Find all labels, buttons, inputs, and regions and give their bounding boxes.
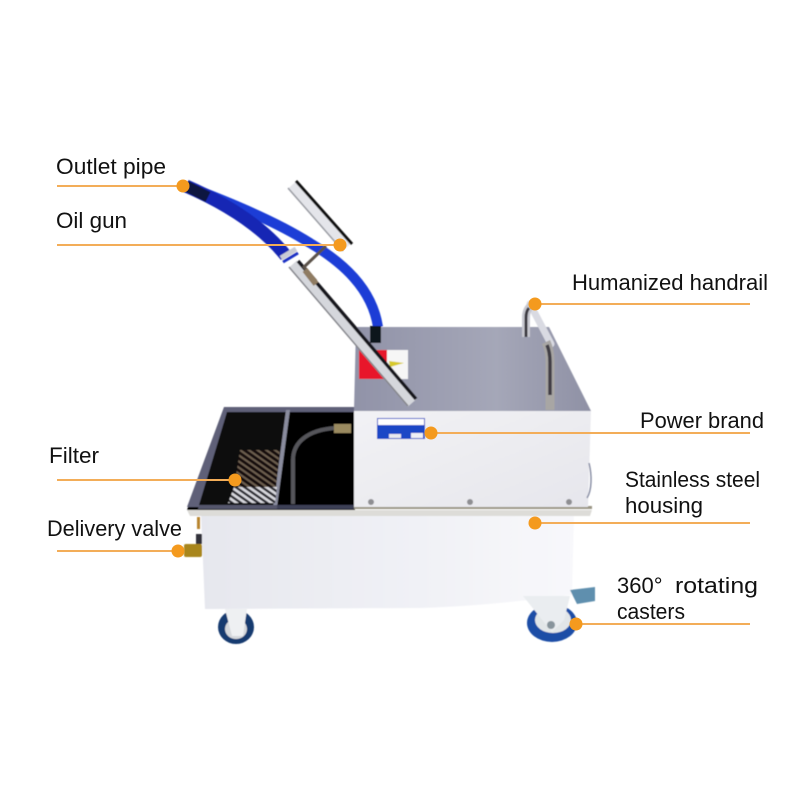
filter mesh <box>234 450 280 488</box>
label: Humanized handrail: Humanized handrail <box>572 270 768 295</box>
label: Stainless steel housing: housing <box>625 493 703 518</box>
right caster <box>523 587 595 642</box>
label: Filter <box>49 443 242 486</box>
label: Delivery valve <box>47 516 184 558</box>
casters <box>218 587 595 644</box>
label: Oil gun: Oil gun <box>56 208 127 233</box>
label: Filter: Filter <box>49 443 99 468</box>
label: 360° rotating casters: rotating <box>675 573 758 598</box>
lower stainless steel body <box>201 514 574 609</box>
left caster <box>218 609 254 644</box>
delivery valve <box>184 517 202 557</box>
oil gun <box>281 181 416 406</box>
power cord <box>587 463 591 498</box>
label: Power brand <box>424 408 764 440</box>
flexible hose <box>293 428 335 504</box>
filter tray <box>187 407 355 510</box>
rim <box>187 510 592 516</box>
label: 360° rotating casters <box>570 573 758 630</box>
label: 360° rotating casters: casters <box>617 599 685 624</box>
label: Outlet pipe: Outlet pipe <box>56 154 166 179</box>
label: Stainless steel housing <box>528 467 760 530</box>
label: 360° rotating casters: 360° <box>617 573 663 598</box>
label: Power brand: Power brand <box>640 408 764 433</box>
machine <box>184 181 595 644</box>
upper housing top <box>354 327 591 411</box>
upper housing front <box>354 411 591 507</box>
outlet pipe <box>186 186 381 343</box>
warning sticker <box>359 350 408 379</box>
label: Outlet pipe <box>56 154 190 192</box>
screws <box>368 499 572 505</box>
handrail <box>526 304 551 410</box>
label: Oil gun <box>56 208 346 252</box>
control plate <box>377 418 425 439</box>
label: Delivery valve: Delivery valve <box>47 516 182 541</box>
label: Stainless steel housing: Stainless steel <box>625 467 760 492</box>
label: Humanized handrail <box>528 270 768 310</box>
